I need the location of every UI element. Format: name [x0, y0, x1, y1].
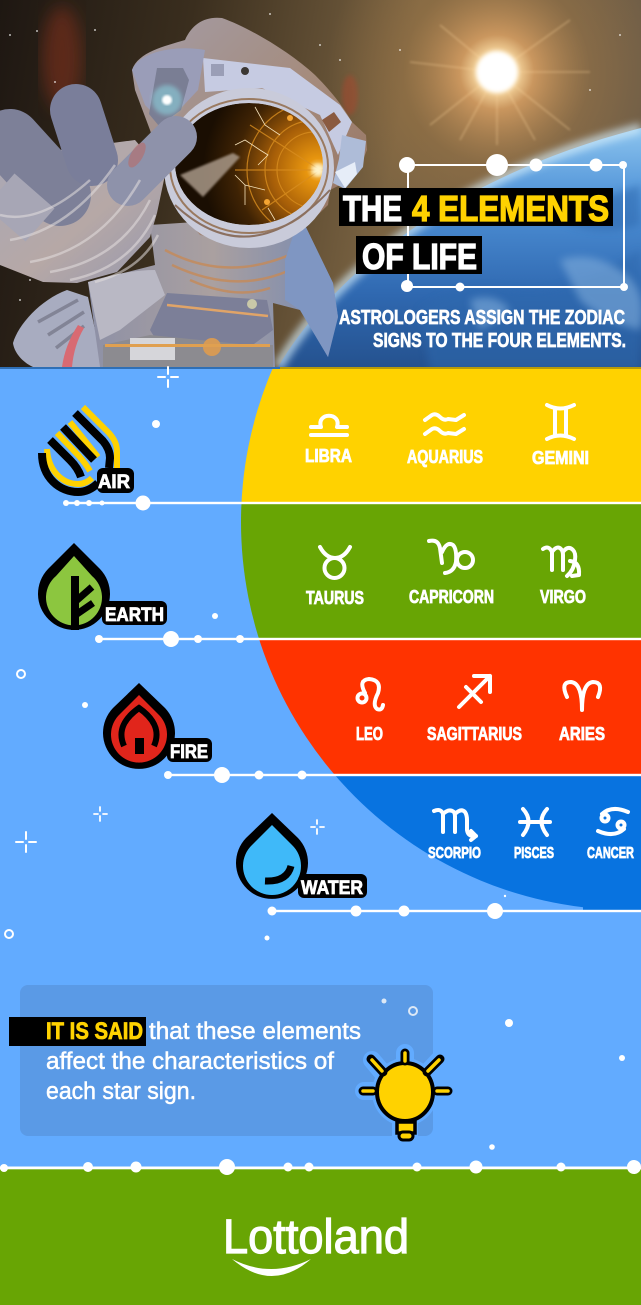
sign: aquarius — [407, 414, 483, 467]
sign: sagittarius — [427, 676, 522, 744]
sign: aries — [559, 682, 605, 744]
title line 1: THE — [343, 188, 402, 229]
astronaut body — [88, 215, 338, 367]
sign: scorpio — [428, 810, 481, 862]
highlight bar — [9, 1017, 146, 1046]
title frame with dots — [399, 154, 628, 292]
sign: scorpio: SCORPIO — [428, 845, 481, 862]
icon: light bulb — [363, 1053, 448, 1142]
sign: virgo — [540, 548, 586, 607]
sign: libra — [305, 416, 352, 466]
panel: it is said callout — [9, 985, 433, 1136]
divider line: water — [268, 903, 641, 919]
callout highlight text: IT IS SAID — [46, 1018, 143, 1045]
decorative stars and dots — [5, 367, 625, 1150]
sign: cancer — [587, 809, 634, 862]
divider line: air — [63, 496, 641, 510]
footer band — [0, 1169, 641, 1305]
sign: aquarius: AQUARIUS — [407, 447, 483, 467]
label: water: WATER — [301, 878, 363, 899]
title yellow words: 4 ELEMENTS — [412, 188, 609, 229]
astronaut glove — [0, 110, 176, 283]
sign: gemini: GEMINI — [532, 448, 589, 468]
astronaut visor with constellations — [175, 103, 323, 225]
callout body text: affect the characteristics of — [46, 1048, 334, 1075]
astronaut leg — [13, 290, 103, 367]
label: fire: FIRE — [170, 742, 208, 763]
icon: water — [236, 813, 308, 899]
sign: capricorn — [409, 541, 494, 607]
divider line: fire — [164, 767, 641, 783]
astronaut helmet lamp — [149, 68, 189, 126]
sign: pisces: PISCES — [514, 845, 554, 862]
callout body text: that these elements — [149, 1018, 361, 1045]
subtitle — [339, 307, 626, 352]
panel: zodiac quarter circle — [230, 367, 641, 911]
sign: gemini — [532, 405, 589, 468]
callout body text — [46, 1018, 361, 1105]
title line 2: OF LIFE — [362, 236, 477, 277]
sign: leo — [356, 679, 383, 744]
sign: taurus — [306, 547, 364, 608]
sign: libra: LIBRA — [305, 446, 352, 466]
sign: virgo: VIRGO — [540, 587, 586, 607]
logo: lottoland: Lottoland — [223, 1211, 409, 1264]
sign: pisces — [514, 809, 554, 862]
sign: taurus: TAURUS — [306, 588, 364, 608]
icon: fire — [103, 683, 175, 769]
label: air: AIR — [98, 472, 130, 493]
sign: aries: ARIES — [559, 724, 605, 744]
astronaut helmet — [132, 18, 367, 245]
icon: earth — [38, 543, 110, 630]
label: earth: EARTH — [105, 605, 164, 626]
icon: air — [42, 407, 117, 492]
title block — [339, 154, 628, 292]
footer dotted line — [0, 1159, 641, 1175]
astronaut chest pack — [150, 293, 273, 347]
sign: capricorn: CAPRICORN — [409, 587, 494, 607]
sign: leo: LEO — [356, 724, 383, 744]
callout body text: each star sign. — [46, 1078, 196, 1105]
sign: sagittarius: SAGITTARIUS — [427, 724, 522, 744]
header photo: astronaut in space — [0, 0, 641, 370]
divider line: earth — [95, 631, 641, 647]
